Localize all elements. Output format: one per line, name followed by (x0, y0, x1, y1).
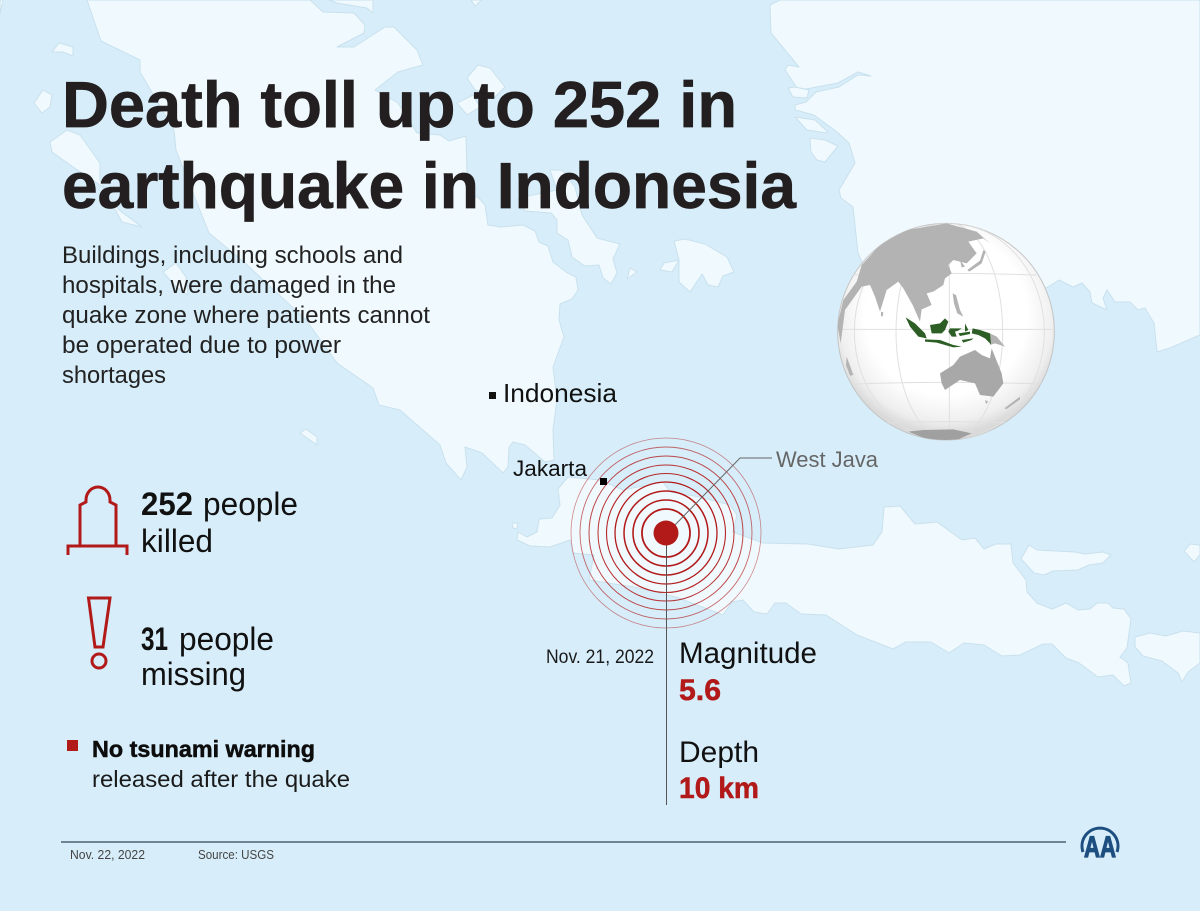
logo: AA: AA (1084, 831, 1116, 864)
map: Bangka island (518, 170, 620, 284)
stat: people killed: killed (141, 523, 213, 559)
description: shortages (62, 362, 166, 389)
description: quake zone where patients cannot (62, 302, 430, 329)
globe: Japan and islands (846, 250, 1020, 409)
stat: people killed: people (203, 486, 298, 522)
map: small islands (0, 0, 1200, 562)
label: Jakarta: Jakarta (513, 456, 588, 481)
stat: people missing: 31 (141, 621, 168, 657)
description: hospitals, were damaged in the (62, 272, 396, 299)
depth: Depth (679, 736, 759, 769)
map: top right landmass (Borneo) (770, 0, 1200, 352)
globe: Indonesia highlighted (906, 317, 991, 347)
map: Belitung island (660, 239, 734, 292)
map: Java (517, 477, 1131, 686)
map: Madura (1021, 545, 1111, 575)
stat: people killed: 252 (141, 486, 193, 522)
description: be operated due to power (62, 332, 341, 359)
icon: gravestone (68, 487, 127, 555)
label: Jakarta (513, 456, 607, 485)
epicenter dot (654, 520, 678, 546)
title: Death toll up to 252 in (62, 68, 737, 141)
note: no tsunami warning: No tsunami warning (92, 736, 315, 762)
description (62, 242, 430, 389)
title (62, 68, 797, 222)
globe graticule (840, 223, 1053, 440)
label: Indonesia: Indonesia (503, 378, 618, 408)
base map: islands of western Indonesia (0, 0, 1200, 686)
date of quake: Nov. 21, 2022 (546, 647, 654, 668)
footer date: Nov. 22, 2022 (70, 847, 145, 862)
depth line (666, 540, 668, 805)
depth (679, 736, 759, 805)
footer source: Source: USGS (198, 847, 274, 862)
depth: 10 km (679, 772, 759, 805)
stat: people missing: people (179, 621, 274, 657)
magnitude: Magnitude (679, 637, 817, 670)
globe: Antarctica (908, 429, 972, 440)
globe: Asia (837, 223, 990, 343)
globe sphere (838, 223, 1054, 440)
note: no tsunami warning (67, 736, 350, 792)
map: Bali (1135, 631, 1200, 682)
note: no tsunami warning: released after the quake (92, 766, 350, 792)
magnitude (679, 637, 817, 707)
West Java leader line (674, 458, 772, 526)
epicenter rings (571, 438, 761, 628)
magnitude: 5.6 (679, 674, 721, 707)
stat: people killed (141, 486, 298, 559)
description: Buildings, including schools and (62, 242, 403, 269)
title: earthquake in Indonesia (62, 149, 797, 222)
footer rule (61, 841, 1066, 843)
stat: people missing: missing (141, 656, 246, 692)
globe: Australia (940, 348, 1003, 397)
label: West Java: West Java (776, 447, 879, 472)
locator globe (837, 223, 1054, 442)
icon: exclamation mark (88, 598, 110, 668)
stat: people missing (141, 621, 274, 692)
map: Sumatra (87, 0, 578, 480)
